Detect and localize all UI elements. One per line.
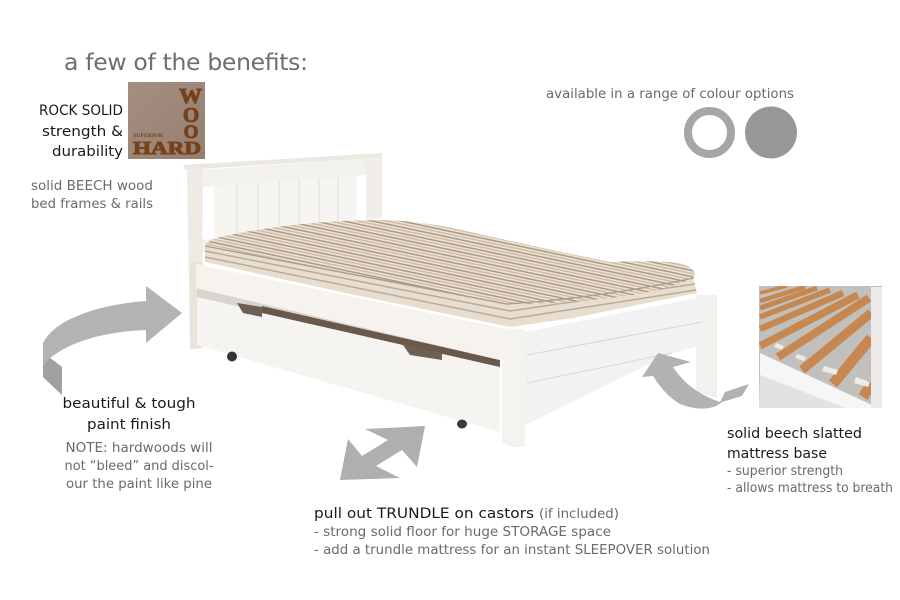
slat webbing <box>774 343 870 387</box>
text: trundle: (if included) <box>539 507 619 522</box>
text: slatted base <box>727 426 893 496</box>
text: rock solid strength and durability: strength & <box>42 124 123 140</box>
text: trundle: pull out TRUNDLE on castors <box>314 506 534 522</box>
side rail <box>196 264 512 362</box>
arrow: slatted base <box>642 353 749 409</box>
icon: superior hardwood badge: SUPERIOR <box>133 134 163 139</box>
text: paint finish: NOTE: hardwoods will <box>66 441 212 456</box>
text: colour options: available in a range of colour options <box>546 87 794 102</box>
text: rock solid strength and durability: ROCK SOLID <box>39 103 123 119</box>
icon: superior hardwood badge: HARD <box>133 138 201 158</box>
bed illustration <box>183 153 717 447</box>
mattress side <box>205 246 697 327</box>
text: rock solid strength and durability: durability <box>52 144 123 160</box>
text: paint finish <box>62 396 214 492</box>
text: paint finish: our the paint like pine <box>66 477 212 492</box>
mattress top <box>205 220 695 304</box>
icon: superior hardwood badge <box>128 82 205 159</box>
photo: slatted mattress base <box>759 286 882 408</box>
foot end and legs <box>502 295 717 447</box>
text: solid beech wood: solid BEECH wood <box>31 179 153 194</box>
text: slatted base: mattress base <box>727 446 827 462</box>
slats <box>760 286 872 397</box>
headboard <box>183 153 382 349</box>
text: paint finish: not “bleed” and discol- <box>64 459 214 474</box>
text: rock solid strength and durability <box>39 103 123 160</box>
icon: grey colour swatch <box>745 106 797 158</box>
text: paint finish: beautiful & tough <box>62 396 196 412</box>
arrow: trundle pull out <box>340 426 425 480</box>
text: trundle: - add a trundle mattress for an instant SLEEPOVER solution <box>314 543 710 558</box>
title: a few of the benefits: <box>64 48 308 76</box>
text: solid beech wood <box>31 179 153 212</box>
icon: superior hardwood badge: W <box>179 84 202 108</box>
text: slatted base: - allows mattress to breath <box>727 481 893 496</box>
text: trundle <box>314 506 710 558</box>
arrow: paint finish <box>43 286 182 395</box>
icon: superior hardwood badge: O <box>183 103 199 127</box>
icon: white colour swatch <box>688 111 731 154</box>
rear castor <box>457 420 467 428</box>
text: solid beech wood: bed frames & rails <box>31 197 153 212</box>
castors <box>227 352 237 362</box>
text: slatted base: - superior strength <box>727 464 843 479</box>
text: trundle: - strong solid floor for huge STORAGE space <box>314 525 611 540</box>
trundle drawer <box>197 288 500 432</box>
text: paint finish: paint finish <box>87 417 171 433</box>
icon: superior hardwood badge: O <box>184 122 198 143</box>
mattress piping <box>205 246 694 304</box>
text: slatted base: solid beech slatted <box>727 426 862 442</box>
